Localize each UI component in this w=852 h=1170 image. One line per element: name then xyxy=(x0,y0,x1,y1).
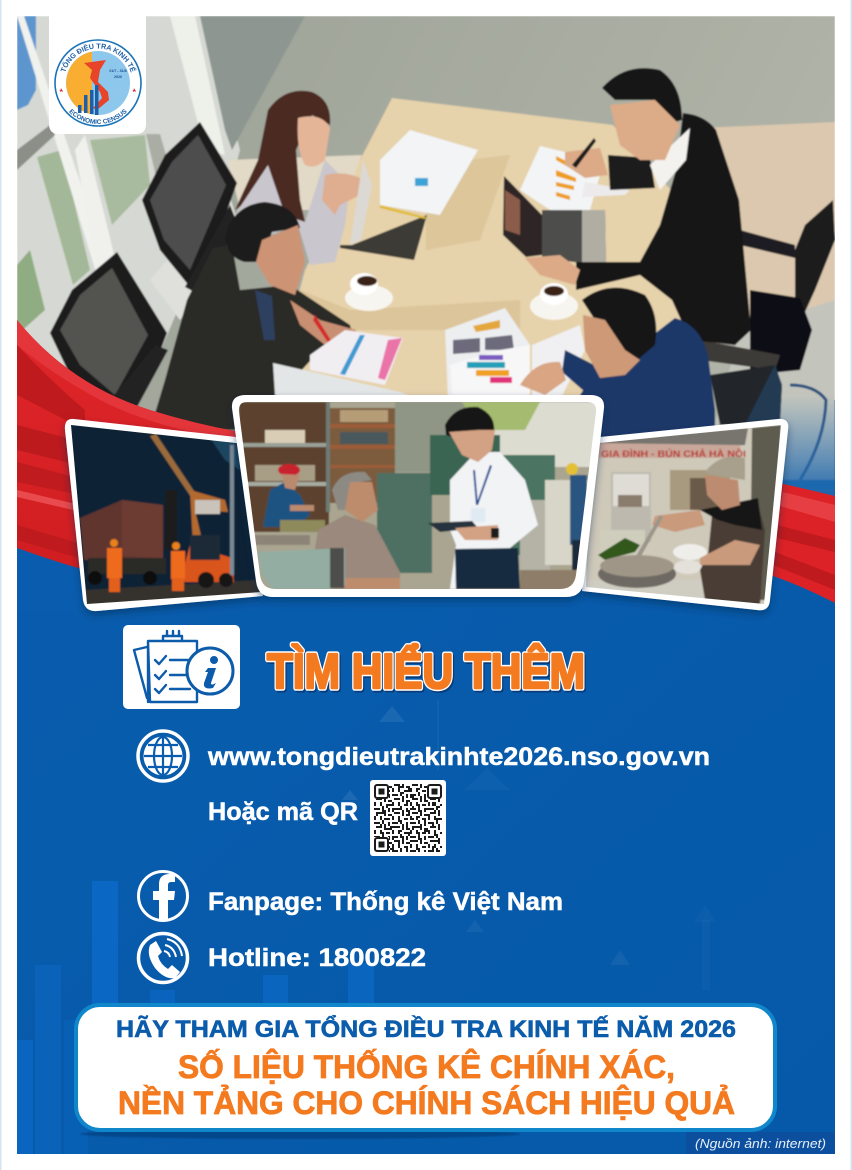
red swoosh: right xyxy=(770,482,835,603)
call to action box xyxy=(76,1005,775,1139)
icon: phone xyxy=(138,934,188,982)
chair: back left xyxy=(142,122,238,295)
red swoosh: left xyxy=(17,320,236,568)
photo frame: workshop xyxy=(232,395,604,597)
icon: globe xyxy=(138,731,188,781)
sewing machine xyxy=(258,548,345,589)
photo frame: port and containers xyxy=(65,419,263,611)
chair: right xyxy=(700,200,835,480)
laptop right xyxy=(503,176,606,266)
banner text: GIA ĐÌNH - BÚN CHẢ HÀ NỘI xyxy=(601,448,746,460)
laptop lid at bottom xyxy=(272,362,409,395)
cup right xyxy=(530,283,578,320)
photo: noodle stall scene xyxy=(580,425,785,610)
window frames at left xyxy=(17,16,305,400)
laptop and notebook near woman xyxy=(340,130,478,260)
call to action line 1: HÃY THAM GIA TỔNG ĐIỀU TRA KINH TẾ NĂM 2026 xyxy=(116,1015,736,1043)
QR code xyxy=(370,780,446,856)
person: man right in black suit xyxy=(525,68,751,345)
old man xyxy=(310,515,400,589)
blue background xyxy=(17,400,835,1154)
chart paper xyxy=(520,146,630,210)
heading: Tìm hiểu thêm: TÌM HIỂU THÊM xyxy=(268,646,586,701)
person: man right in navy suit xyxy=(520,288,715,450)
icon: facebook xyxy=(138,872,188,920)
website address: www.tongdieutrakinhte2026.nso.gov.vn xyxy=(207,743,710,771)
icon: clipboard with info xyxy=(123,625,240,709)
chair: front left xyxy=(50,252,168,420)
logo tab xyxy=(49,16,146,134)
logo date: 01/7 - 31/8 xyxy=(109,69,127,73)
photo: workshop scene xyxy=(235,400,600,595)
photo frame: noodle stall xyxy=(582,419,788,610)
logo year: 2026 xyxy=(114,75,122,79)
seated worker in red cap xyxy=(263,482,310,527)
logo bottom arc text: ECONOMIC CENSUS xyxy=(69,108,126,124)
QR label: Hoặc mã QR xyxy=(208,798,358,826)
form on table xyxy=(310,330,403,385)
cup left xyxy=(345,273,393,311)
logo emblem: economic census xyxy=(54,39,142,127)
surveyor xyxy=(450,452,538,589)
person: woman xyxy=(235,91,365,265)
hotline text: Hotline: 1800822 xyxy=(208,944,426,972)
concrete background xyxy=(136,16,835,431)
background chart motif xyxy=(17,700,716,1155)
slogan line 2: NỀN TẢNG CHO CHÍNH SÁCH HIỆU QUẢ xyxy=(118,1085,735,1121)
image credit xyxy=(686,1132,835,1154)
photo: port scene xyxy=(71,425,260,604)
slogan line 1: SỐ LIỆU THỐNG KÊ CHÍNH XÁC, xyxy=(178,1049,675,1085)
fade of photo into blue at lower right xyxy=(780,395,835,500)
image credit: (Nguồn ảnh: internet) xyxy=(695,1136,826,1151)
person: man left in black suit xyxy=(150,202,356,430)
charts on table xyxy=(445,308,585,400)
wooden floor at right xyxy=(714,122,835,319)
fanpage text: Fanpage: Thống kê Việt Nam xyxy=(208,888,563,916)
meeting table xyxy=(298,98,718,395)
heading: Tìm hiểu thêm: TÌM HIỂU THÊM xyxy=(267,644,585,699)
main photo: business meeting xyxy=(17,16,835,500)
logo top arc text: TỔNG ĐIỀU TRA KINH TẾ xyxy=(60,44,137,72)
heading: Tìm hiểu thêm: TÌM HIỂU THÊM xyxy=(267,644,585,699)
